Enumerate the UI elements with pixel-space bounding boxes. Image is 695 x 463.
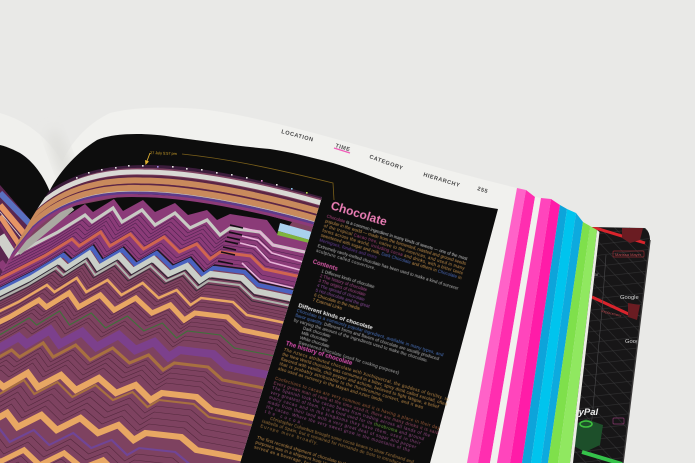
history paragraph: The Aztecs attributed chocolate with Xochiquetzal, the goddess of fertility. In — [283, 347, 450, 402]
different kinds body: by varying the amount of the ingredients used to make the chocolate. — [293, 317, 429, 363]
cacao trade paragraph: the cacao. Where the very sweet grow in the mountains of the — [266, 404, 411, 453]
back cover of book: Google — [625, 339, 644, 345]
contents list: 5 Hot chocolate and the great — [315, 287, 371, 309]
purple wide zigzag — [0, 324, 268, 379]
history paragraph: the New World chocolate was consumed in a bitter, spicy drink called xocolatl, often — [282, 352, 448, 407]
columbus paragraph: Europe more broadly. — [260, 423, 319, 446]
cacao trade paragraph: the cocoa. — [264, 409, 304, 425]
cacao trade paragraph: very greatest of them. It is a food used for its theobroma and ground — [270, 390, 425, 442]
contents list: 6 Chocolate in the media — [314, 292, 361, 311]
tab: pink front — [467, 188, 535, 463]
orange red zigzag — [0, 230, 298, 280]
page edge tabs — [467, 188, 600, 463]
gray top zigzag — [14, 206, 306, 257]
contents list: 3 The origins of chocolate — [318, 278, 367, 297]
date callout with arrow — [145, 151, 334, 200]
back cover of book: Replacement — [601, 309, 622, 318]
intro paragraph — [319, 213, 469, 285]
black gaps above zigzags — [68, 194, 292, 234]
cacao trade paragraph: The Spanish took the cacao beans from trading across all lands of the — [272, 385, 431, 438]
different kinds body: Dark chocolate — [302, 325, 332, 339]
white page edge — [570, 230, 600, 463]
back cover of book: PayPal — [567, 407, 599, 418]
intro paragraph: of the tropical Cacao tree, native to the Americas, and used in many — [323, 223, 466, 271]
cacao trade paragraph — [264, 375, 441, 463]
intro paragraph: Meringues, fondues and more — [319, 237, 378, 260]
timeline chart — [0, 165, 322, 463]
cacao trade paragraph: many cacao and in the kingdoms they have them, used in their — [269, 395, 422, 446]
intro paragraph: Chocolate is a common ingredient in many kinds of sweets — one of the most — [326, 213, 469, 261]
intro paragraph: forms across the world, including cocoa and drinks, with a bitter taste — [322, 228, 464, 276]
orange zigzags — [0, 276, 284, 463]
different kinds body: Milk chocolate — [301, 330, 329, 343]
page navigation: HIERARCHY — [422, 172, 461, 189]
history paragraph: flavored with vanilla, chili pepper and achiote, believed to fight fatigue, a belief — [280, 356, 440, 410]
purple upper band — [0, 199, 308, 288]
green contour line — [0, 310, 274, 356]
back cover of book: Marissa Mayer — [615, 252, 642, 257]
back cover of book — [570, 227, 651, 463]
different kinds heading: Different kinds of chocolate — [297, 303, 374, 332]
time underline — [334, 148, 350, 153]
top arc bands — [0, 166, 340, 275]
black tabs — [218, 225, 243, 264]
gutter shadow — [44, 127, 80, 189]
legend blue and green block — [277, 223, 312, 243]
back cover of book: bar — [592, 272, 599, 277]
black panel right page — [50, 134, 498, 463]
history heading: The history of chocolate — [285, 341, 353, 367]
page navigation: LOCATION — [280, 129, 314, 144]
dark contour lines in maroon — [0, 268, 286, 463]
cacao trade paragraph: Every grown man of rank at the time used it, there are many drinks it is said — [273, 380, 440, 436]
right page — [0, 108, 517, 463]
cacao trade paragraph: made from their land with a very great deal of sugar and pepper — [267, 399, 417, 450]
tab: blue — [522, 205, 583, 463]
article text — [254, 202, 468, 463]
white gap between tabs — [490, 197, 541, 463]
photo of open book — [0, 130, 651, 463]
history paragraph: also used as currency in the Mayan and Aztec lands. — [277, 366, 384, 403]
page navigation: CATEGORY — [368, 154, 404, 172]
left page — [0, 113, 64, 290]
brown zigzag — [0, 341, 264, 426]
thin purple zigzag — [0, 428, 190, 463]
date callout with arrow: 27 July 5:57 pm — [150, 151, 177, 156]
tab: pink second — [497, 198, 560, 463]
left page black area — [0, 145, 50, 222]
contents heading: Contents — [312, 259, 339, 273]
intro paragraph: sweetened with sugar and milk, Dark Chocolate and others in Chocolate in — [320, 233, 463, 281]
different kinds body — [287, 308, 445, 386]
left page chart — [0, 185, 30, 277]
contents list — [312, 268, 377, 319]
page navigation — [280, 129, 489, 195]
contents list: 4 The spread of chocolate — [316, 283, 366, 302]
right pink stripes — [240, 228, 305, 288]
article title: Chocolate — [329, 198, 389, 229]
different kinds body: White chocolate — [299, 335, 331, 349]
chart base — [0, 160, 340, 463]
gray wedge left — [18, 207, 72, 252]
contents list: 1 Different kinds of chocolate — [321, 268, 376, 289]
different kinds body: Chocolate is a commonly popular ingredient, available in many types, and — [296, 308, 445, 358]
intro paragraph: popular in the world — made from the fermented, roasted and ground seeds — [325, 218, 467, 266]
columbus paragraph: Christopher Columbus brought some cocoa beans to show Ferdinand and — [270, 416, 415, 463]
contents list: 7 External Links — [312, 297, 343, 311]
contents list: 2 The history of chocolate — [319, 273, 368, 292]
tab: green — [548, 222, 597, 463]
second paragraph: sculpture called couverture. — [316, 248, 376, 271]
page navigation: TIME — [334, 143, 351, 153]
second paragraph: Extremely rarely-melted chocolate has been used to make a kind of sorcerer — [317, 243, 460, 291]
timeline dots — [76, 165, 308, 194]
history paragraph: that is probably attributable to the theobromine content, and it was — [279, 361, 424, 410]
different kinds body: flavor quantity. Different forms and flavors of chocolate are usually produced — [295, 313, 440, 361]
blue and gray zigzags — [0, 244, 294, 309]
back cover of book: Google — [620, 295, 639, 301]
page navigation: 255 — [476, 186, 489, 195]
thin dark lines in purple band — [0, 212, 304, 286]
cacao trade paragraph: Confections to cacao are very common and it is having a place in their day — [275, 375, 441, 431]
different kinds body: Sweetened chocolate (used for cooking purposes) — [298, 340, 400, 375]
